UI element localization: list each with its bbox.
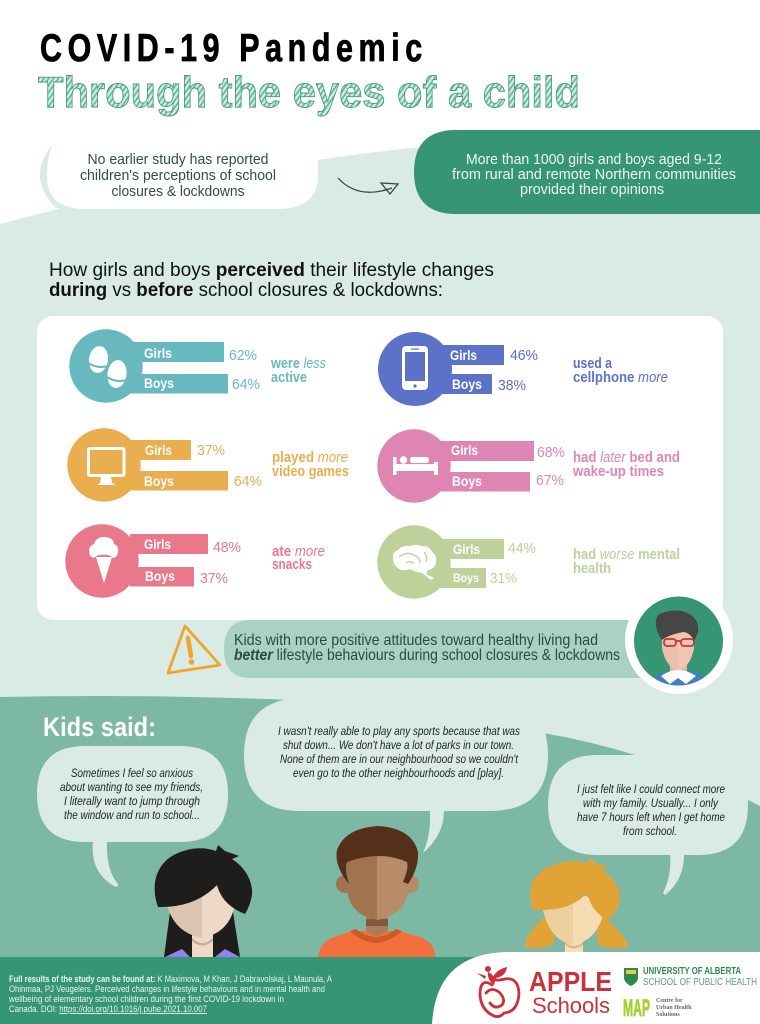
- stat: less active: were less: [270, 356, 326, 372]
- callout: no earlier study: children's perceptions of school: [80, 168, 276, 184]
- stat: cellphone: [378, 332, 668, 406]
- footer citation: [8, 974, 332, 1014]
- stat: snacks: 37%: [200, 570, 228, 587]
- stat: snacks: 48%: [213, 539, 241, 556]
- callout: participants: provided their opinions: [520, 182, 664, 198]
- title: [38, 26, 580, 117]
- stat: cellphone: used a: [573, 356, 613, 372]
- heading: kids said: Kids said:: [43, 712, 156, 742]
- icon: warning triangle: [168, 626, 220, 673]
- title: Through the eyes of a child: [38, 68, 580, 117]
- stat: mental health: Boys: [453, 571, 479, 585]
- stat: snacks: Girls: [144, 537, 171, 552]
- stat: bed and wake-up times: [377, 429, 680, 503]
- callout: no earlier study: [40, 145, 318, 209]
- panel: logos: [432, 952, 760, 1024]
- stat: bed and wake-up times: wake-up times: [572, 464, 664, 480]
- callout: positive attitudes: [224, 620, 660, 678]
- stat: mental health: Girls: [453, 542, 480, 557]
- stat: video games: 64%: [234, 473, 262, 490]
- speech bubble 2: [244, 698, 548, 853]
- callout: participants: [414, 130, 760, 214]
- stat: mental health: 44%: [508, 540, 536, 557]
- logo: MAP centre: Solutions: [656, 1012, 680, 1018]
- stat: snacks: [65, 524, 325, 598]
- footer citation: Ohinmaa, PJ Veugelers. Perceived changes in lifestyle behaviours and in mental health and: [9, 984, 325, 994]
- icon: teacher avatar: [625, 586, 733, 694]
- stat: bed and wake-up times: had later bed and: [573, 450, 680, 466]
- stat: cellphone: 46%: [510, 347, 538, 364]
- callout: positive attitudes: Kids with more positive attitudes toward healthy living had: [234, 632, 598, 649]
- speech bubble 2: even go to the other neighbourhoods and [play].: [293, 768, 504, 780]
- stat: video games: played more: [272, 450, 348, 466]
- speech bubble 1: [37, 746, 228, 887]
- speech bubble 1: I literally want to jump through: [64, 796, 200, 808]
- speech bubble 2: I wasn't really able to play any sports because that was: [278, 726, 520, 738]
- stat: mental health: had worse mental: [573, 547, 680, 563]
- stat: less active: 62%: [229, 347, 257, 364]
- stat: cellphone: Girls: [450, 348, 477, 363]
- panel: lifestyle changes card: [37, 316, 723, 620]
- logo: MAP centre: Urban Health: [656, 1005, 692, 1011]
- speech bubble 3: [548, 755, 748, 895]
- logo: university of alberta: [624, 966, 757, 988]
- footer citation: Full results of the study can be found at: K Maximova, M Khan, J Dabravolskaj, L Maunula, A: [9, 974, 332, 984]
- heading: [49, 260, 494, 301]
- illustration: girl with black hair: [155, 845, 252, 957]
- speech bubble 2: None of them are in our neighbourhood so we couldn't: [280, 754, 519, 766]
- speech bubble 3: I just felt like I could connect more: [577, 784, 725, 796]
- stat: video games: Boys: [144, 474, 174, 489]
- stat: cellphone: cellphone more: [573, 370, 668, 386]
- stat: less active: Girls: [144, 346, 172, 361]
- speech bubble 1: Sometimes I feel so anxious: [71, 768, 193, 780]
- stat: mental health: [377, 525, 680, 599]
- illustration: girl with orange pigtails: [524, 856, 629, 955]
- stat: cellphone: Boys: [452, 377, 482, 392]
- stat: mental health: health: [573, 561, 611, 577]
- background: kids section: [0, 696, 760, 1024]
- footer citation: Canada. DOI: https://doi.org/10.1016/j.puhe.2021.10.007: [9, 1004, 207, 1014]
- callout: participants: from rural and remote Northern communities: [452, 167, 736, 183]
- speech bubble 1: about wanting to see my friends,: [60, 782, 203, 794]
- stat: bed and wake-up times: Girls: [451, 443, 478, 458]
- stat: video games: video games: [272, 464, 349, 480]
- stat: bed and wake-up times: 67%: [536, 472, 564, 489]
- stat: snacks: Boys: [145, 569, 175, 584]
- stat: bed and wake-up times: 68%: [537, 444, 565, 461]
- stat: video games: [67, 428, 349, 502]
- speech bubble 3: have 7 hours left when I get home: [577, 812, 725, 824]
- stat: snacks: snacks: [272, 557, 312, 573]
- stat: less active: [69, 329, 326, 403]
- stat: less active: Boys: [144, 376, 174, 391]
- speech bubble 2: shut down... We don't have a lot of parks in our town.: [283, 740, 514, 752]
- stat: bed and wake-up times: Boys: [452, 474, 482, 489]
- stat: less active: 64%: [232, 376, 260, 393]
- stat: video games: 37%: [197, 442, 225, 459]
- callout: no earlier study: No earlier study has reported: [88, 152, 268, 168]
- callout: positive attitudes: better lifestyle behaviours during school closures & lockdowns: [234, 647, 620, 664]
- heading: How girls and boys perceived their lifestyle changes: [49, 260, 494, 281]
- stat: video games: Girls: [145, 443, 172, 458]
- stat: less active: active: [271, 370, 307, 386]
- logo: MAP centre: Centre for: [656, 998, 683, 1004]
- logo: apple schools: Schools: [532, 993, 610, 1018]
- stat: snacks: ate more: [272, 544, 325, 560]
- stat: cellphone: 38%: [498, 377, 526, 394]
- stat: mental health: 31%: [490, 570, 517, 587]
- footer band: [0, 957, 760, 1024]
- logo: MAP centre: MAP: [623, 995, 650, 1022]
- footer citation: wellbeing of elementary school children during the first COVID-19 lockdown in: [8, 994, 284, 1004]
- logo: apple schools: [477, 966, 612, 1018]
- heading: during vs before school closures & lockdowns:: [49, 280, 443, 301]
- callout: no earlier study: closures & lockdowns: [112, 184, 244, 200]
- speech bubble 1: the window and run to school...: [64, 810, 200, 822]
- speech bubble 3: from school.: [623, 826, 677, 838]
- speech bubble 3: with my family. Usually... I only: [583, 798, 719, 810]
- title: COVID-19 Pandemic: [40, 26, 422, 70]
- arrow: [338, 178, 398, 194]
- callout: participants: More than 1000 girls and boys aged 9-12: [466, 152, 722, 168]
- illustration: boy with brown hair: [318, 826, 436, 957]
- logo: apple schools: APPLE: [529, 966, 612, 997]
